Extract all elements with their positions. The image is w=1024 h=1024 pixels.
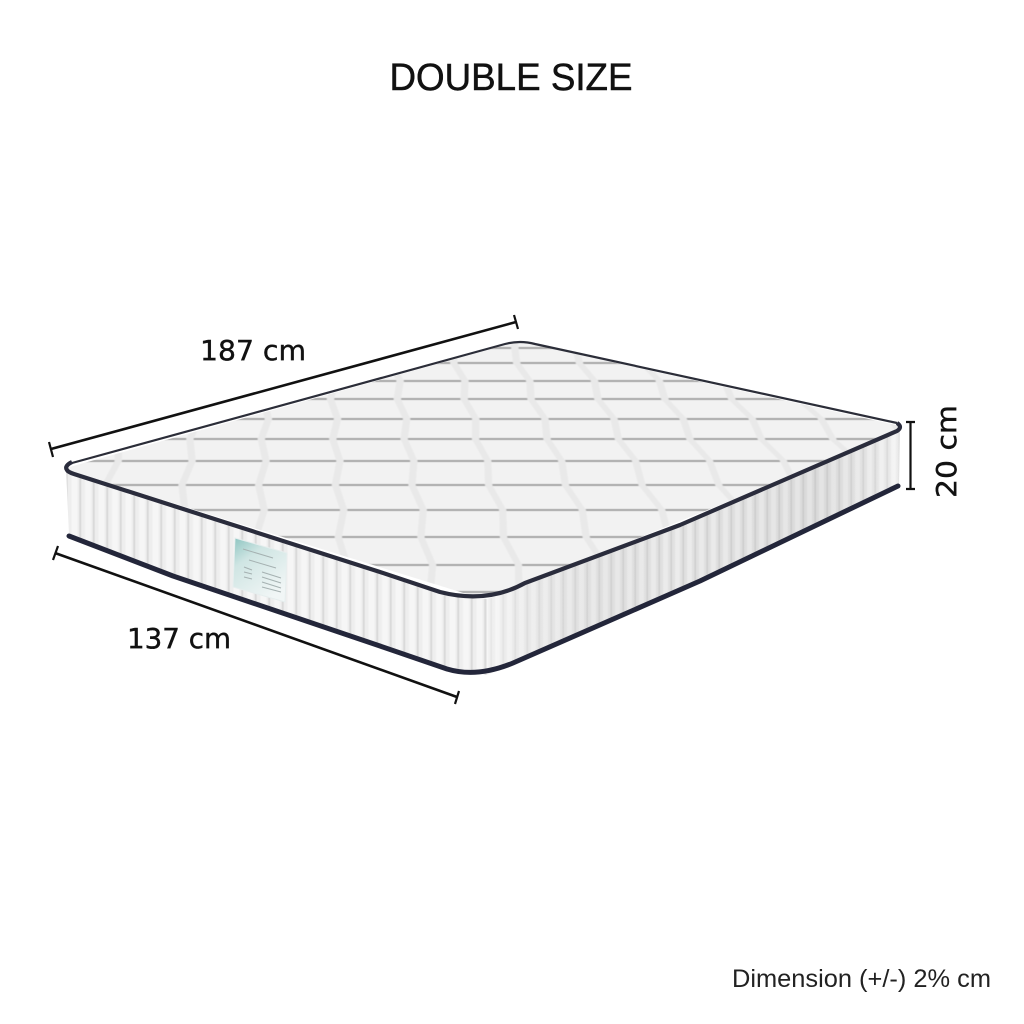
dimension: height bracket (906, 422, 915, 489)
mattress top back piping (72, 342, 897, 463)
mattress quilted top surface (68, 343, 900, 594)
quilting zigzag seams (105, 344, 898, 584)
dimension label: 20 cm: 20 cm (930, 405, 963, 498)
tolerance note: Dimension (+/-) 2% cm (732, 965, 991, 993)
title: DOUBLE SIZE (390, 57, 632, 99)
mattress top front piping (66, 423, 900, 596)
mattress right side face (480, 420, 905, 680)
mattress bottom piping (69, 486, 898, 672)
dimension: width arrow (53, 546, 459, 704)
dimension: length arrow (49, 315, 518, 457)
quilting horizontal seams (60, 348, 910, 592)
mattress (64, 340, 902, 675)
dimension label: 137 cm: 137 cm (127, 622, 231, 655)
product label (233, 538, 287, 602)
dimension label: 187 cm: 187 cm (200, 334, 306, 367)
mattress left side face (60, 460, 490, 680)
